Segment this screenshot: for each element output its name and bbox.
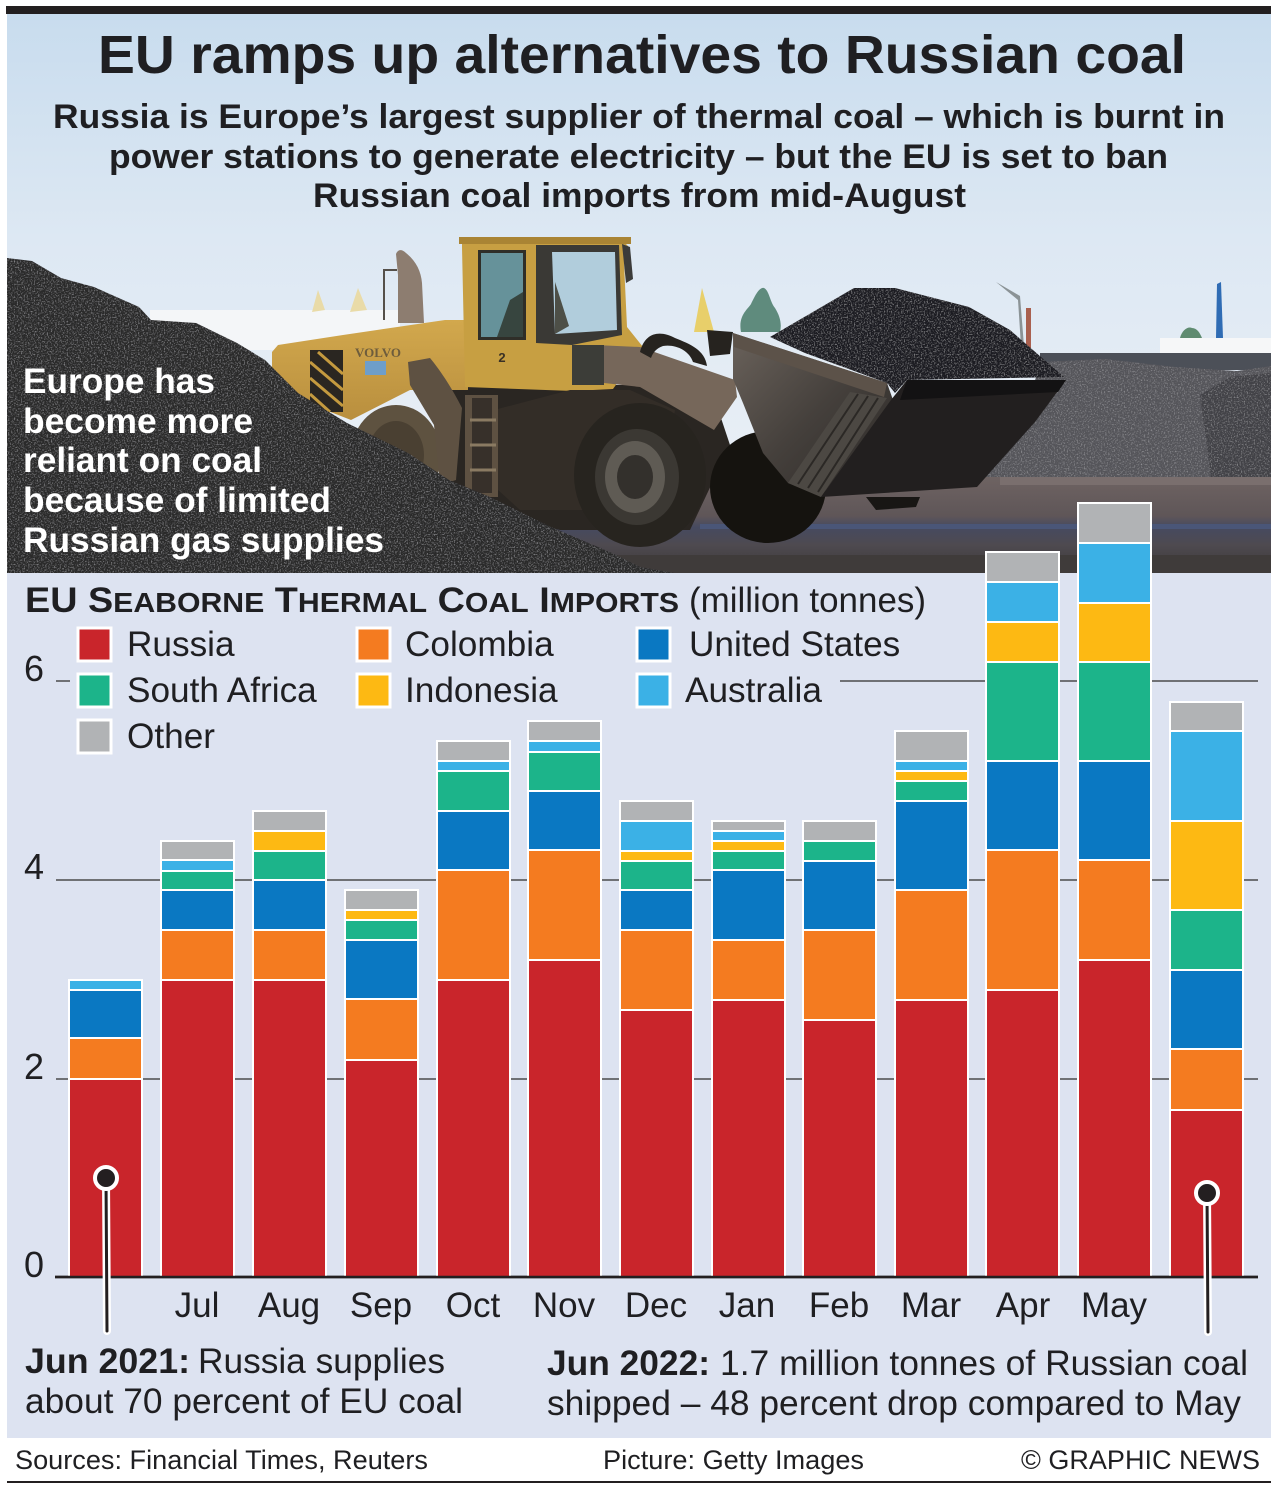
bar: Jun 2021 <box>69 980 142 1277</box>
annotation: Jun 2021: about 70 percent of EU coal <box>25 1382 463 1421</box>
annotation: Jun 2022: 1.7 million tonnes of Russian coal <box>720 1344 1248 1383</box>
loader <box>272 237 826 547</box>
month labels: Oct <box>446 1286 500 1325</box>
annotation: Jun 2022 <box>547 1344 1248 1423</box>
footer: sources and credits: Picture: Getty Images <box>603 1445 864 1475</box>
callout: reliance on coal: Russian gas supplies <box>23 521 384 560</box>
marker: Jun 2021 pin <box>95 1167 117 1331</box>
legend <box>78 625 900 756</box>
legend: Australia <box>685 671 822 710</box>
bar: Sep <box>345 890 418 1277</box>
footer: sources and credits: © GRAPHIC NEWS <box>1021 1445 1260 1475</box>
y axis labels <box>24 648 44 1285</box>
legend: Colombia <box>405 625 554 664</box>
annotation: Jun 2022: Jun 2022: <box>547 1344 710 1383</box>
month labels: Aug <box>258 1286 320 1325</box>
bar: Feb <box>803 821 876 1277</box>
photo: coal loader scene <box>7 14 1271 574</box>
month labels: Dec <box>625 1286 687 1325</box>
marker: Jun 2022 pin <box>1196 1182 1218 1332</box>
bar: Jul <box>161 841 234 1277</box>
left coal pile <box>7 258 680 574</box>
month labels: Apr <box>996 1286 1051 1325</box>
footer: sources and credits: Sources: Financial Times, Reuters <box>15 1445 428 1475</box>
subtitle: Russia is Europe’s largest supplier of thermal coal – which is burnt in <box>53 98 1225 136</box>
bar: Aug <box>253 811 326 1277</box>
y axis labels: 4 <box>24 846 44 887</box>
top black bar <box>6 6 1271 14</box>
month labels: May <box>1081 1286 1148 1325</box>
legend: Russia <box>127 625 235 664</box>
legend: Indonesia <box>405 671 558 710</box>
axis baseline <box>55 1276 1258 1278</box>
callout: reliance on coal: because of limited <box>23 481 331 520</box>
month labels: Nov <box>533 1286 596 1325</box>
callout: reliance on coal: become more <box>23 402 253 441</box>
month labels: Feb <box>809 1286 869 1325</box>
bar: Nov <box>528 721 601 1277</box>
bar: May <box>1078 503 1151 1277</box>
subtitle: Russian coal imports from mid-August <box>313 177 967 215</box>
annotation: Jun 2022: shipped – 48 percent drop compared to May <box>547 1384 1241 1423</box>
panel: chart background <box>7 573 1271 1438</box>
legend: South Africa <box>127 671 317 710</box>
chart heading: EU SEABORNE THERMAL COAL IMPORTS <box>25 581 679 620</box>
loader bucket full of coal <box>733 288 1066 510</box>
bar: Oct <box>437 741 510 1277</box>
annotation: Jun 2021 <box>25 1342 463 1421</box>
month labels: Mar <box>901 1286 961 1325</box>
subtitle: power stations to generate electricity – but the EU is set to ban <box>109 138 1168 176</box>
callout: reliance on coal: Europe has <box>23 362 215 401</box>
y axis labels: 0 <box>24 1244 44 1285</box>
chart gridlines and axis <box>55 681 1258 1277</box>
month labels: Jul <box>175 1286 219 1325</box>
month labels: Sep <box>350 1286 412 1325</box>
subtitle <box>53 98 1225 215</box>
callout: reliance on coal: reliant on coal <box>23 441 262 480</box>
title: EU ramps up alternatives to Russian coal <box>98 25 1186 85</box>
chart heading: (million tonnes) <box>689 581 926 620</box>
month labels <box>175 1286 1148 1325</box>
y axis labels: 2 <box>24 1046 44 1087</box>
footer: sources and credits <box>15 1445 1260 1475</box>
loader: 2 <box>498 350 506 365</box>
bar: Mar <box>895 731 968 1277</box>
bar: Apr <box>986 552 1059 1277</box>
legend: United States <box>689 625 900 664</box>
bar: Jun 2022 <box>1170 702 1243 1277</box>
bar: Dec <box>620 801 693 1277</box>
annotation: Jun 2021: Jun 2021: <box>25 1342 190 1381</box>
month labels: Jan <box>719 1286 775 1325</box>
loader: VOLVO <box>355 345 401 360</box>
y axis labels: 6 <box>24 648 44 689</box>
annotation: Jun 2021: Russia supplies <box>198 1342 445 1381</box>
bar: Jan <box>712 821 785 1277</box>
legend: Other <box>127 717 215 756</box>
callout: reliance on coal <box>23 362 384 560</box>
